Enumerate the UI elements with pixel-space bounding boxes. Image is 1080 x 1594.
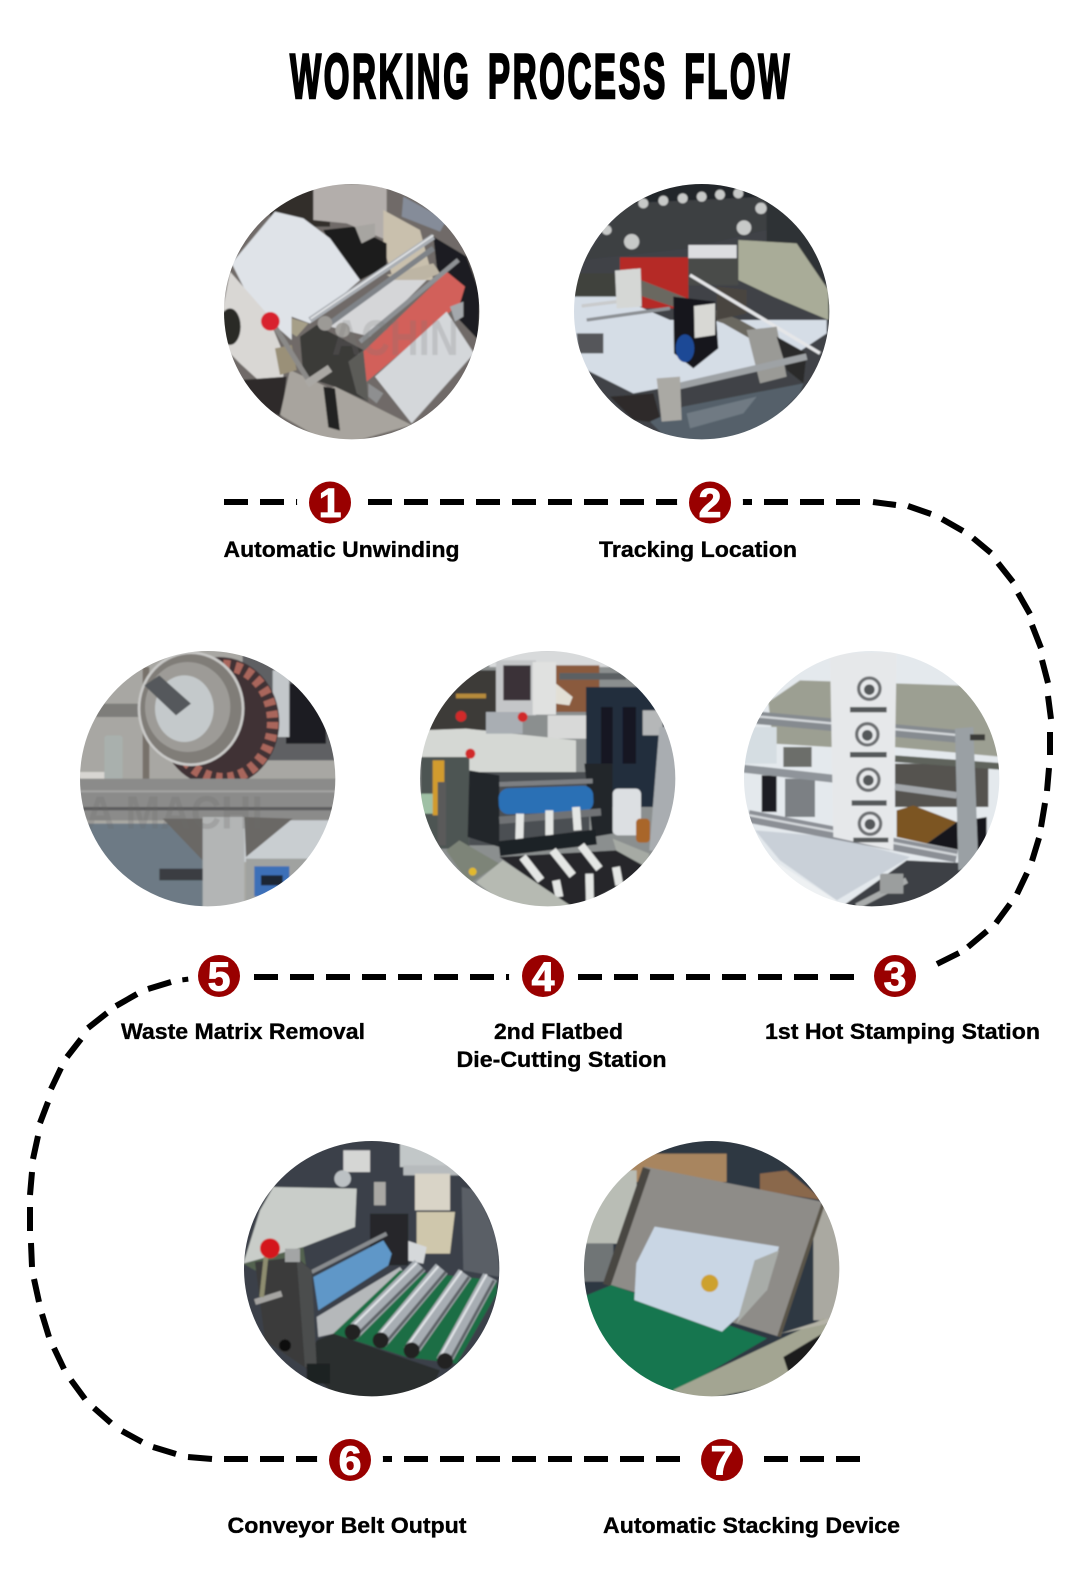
step 4 label: Die-Cutting Station <box>456 1047 666 1072</box>
step 5 photo: waste matrix removal: A MACHI <box>85 788 263 839</box>
step 1 photo: automatic unwinding <box>219 180 484 444</box>
step 2 label: Tracking Location <box>599 537 797 562</box>
dashed process path <box>30 502 1051 1459</box>
step 1 photo: automatic unwinding: ACHIN <box>332 310 459 366</box>
step 6 photo: conveyor belt output <box>240 1137 504 1401</box>
step 3 badge: 3 <box>884 954 906 1000</box>
step 5 badge: 5 <box>208 954 230 1000</box>
step 4 photo: flatbed die-cutting <box>416 647 680 911</box>
step 4 label: 2nd Flatbed <box>494 1019 623 1044</box>
step 1 badge <box>297 469 363 535</box>
step 7 badge: 7 <box>711 1438 733 1484</box>
step 1 label: Automatic Unwinding <box>224 537 460 562</box>
step 5 photo: waste matrix removal <box>76 647 340 911</box>
step 2 badge <box>677 469 743 535</box>
step 2 photo: tracking location <box>570 180 834 444</box>
step 3 badge <box>874 954 916 1000</box>
step 4 label <box>456 1019 666 1072</box>
step 1 badge: 1 <box>319 480 341 526</box>
step 6 badge <box>317 1426 383 1492</box>
step 7 label: Automatic Stacking Device <box>603 1513 900 1538</box>
step 5 label: Waste Matrix Removal <box>121 1019 365 1044</box>
step 6 badge: 6 <box>339 1438 361 1484</box>
step 4 badge <box>509 943 577 1011</box>
step 3 label: 1st Hot Stamping Station <box>765 1019 1040 1044</box>
step 3 photo: hot stamping <box>740 647 1004 911</box>
step 5 badge <box>198 954 240 1000</box>
step 4 badge: 4 <box>532 954 555 1000</box>
step 6 label: Conveyor Belt Output <box>228 1513 467 1538</box>
step 7 badge <box>689 1426 755 1492</box>
step 7 photo: automatic stacking device <box>580 1137 844 1401</box>
step 2 badge: 2 <box>699 480 721 526</box>
